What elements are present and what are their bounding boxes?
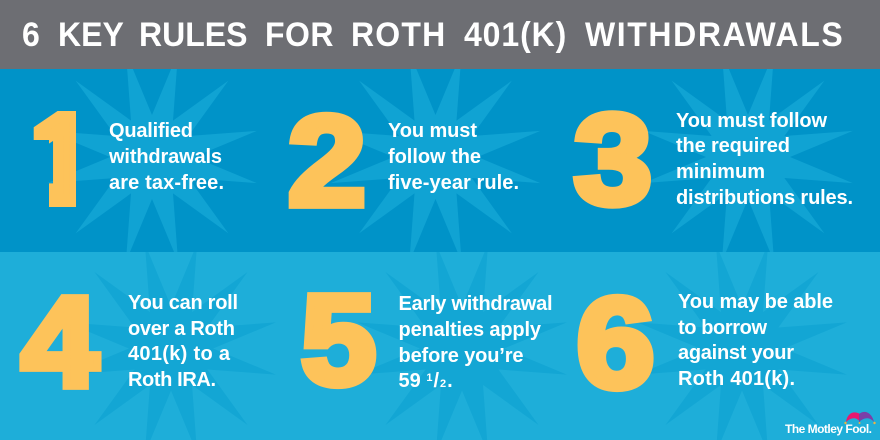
rule 3 text: the required [676, 135, 790, 157]
number 5: 5 [301, 268, 376, 411]
rule 4 text [128, 292, 238, 391]
rule 2 text: You must [388, 120, 477, 142]
title: RULES [139, 16, 247, 54]
rule 5 text [398, 293, 552, 392]
rule 3 text [676, 110, 853, 209]
rule 6 text: Roth 401(k). [678, 368, 795, 390]
rule 1 text: are tax-free. [109, 172, 224, 194]
title: 401(K) [464, 16, 567, 54]
logo: The Motley Fool: The Motley Fool. [785, 422, 872, 436]
rule 1 text: Qualified [109, 120, 193, 142]
title: 6 [22, 16, 40, 54]
title: KEY [58, 16, 124, 54]
rule 5 text: Early withdrawal [398, 293, 552, 315]
rule 5 text: 1 [426, 372, 432, 384]
number 3: 3 [574, 89, 652, 231]
rule 6 text: You may be able [678, 291, 833, 313]
rule 2 text: five-year rule. [388, 172, 519, 194]
rule 3 text: distributions rules. [676, 187, 853, 209]
rule 5 text: / [433, 370, 439, 392]
rule 4 text: over a Roth [128, 318, 235, 340]
rule 5 text: 59 [398, 370, 421, 392]
rule 6 text [678, 291, 833, 390]
title: WITHDRAWALS [585, 16, 844, 54]
rule 5 text: before you’re [398, 345, 524, 367]
number 6: 6 [577, 272, 654, 415]
number 2: 2 [288, 90, 366, 233]
rule 6 text: against your [678, 342, 794, 364]
logo: The Motley Fool [785, 412, 876, 436]
rule 2 text [388, 120, 519, 194]
panel: lower row background [0, 244, 880, 440]
panel: upper row background [48, 69, 852, 252]
rule 5 text: penalties apply [398, 319, 542, 341]
rule 5 text: 2. [440, 370, 453, 392]
rule 3 text: You must follow [676, 110, 827, 132]
number 1: 1 [31, 91, 96, 228]
header band [0, 0, 880, 69]
number 4: 4 [21, 272, 98, 414]
rule 4 text: 401(k) to a [128, 343, 231, 365]
rule 6 text: to borrow [678, 317, 767, 339]
rule 4 text: Roth IRA. [128, 369, 216, 391]
rule 3 text: minimum [676, 161, 765, 183]
rule 4 text: You can roll [128, 292, 238, 314]
rule 2 text: follow the [388, 146, 481, 168]
title: FOR [265, 16, 334, 54]
rule 1 text: withdrawals [108, 146, 222, 168]
rule 1 text [108, 120, 224, 194]
icon: jester hat [844, 412, 876, 424]
title: ROTH [351, 16, 446, 54]
